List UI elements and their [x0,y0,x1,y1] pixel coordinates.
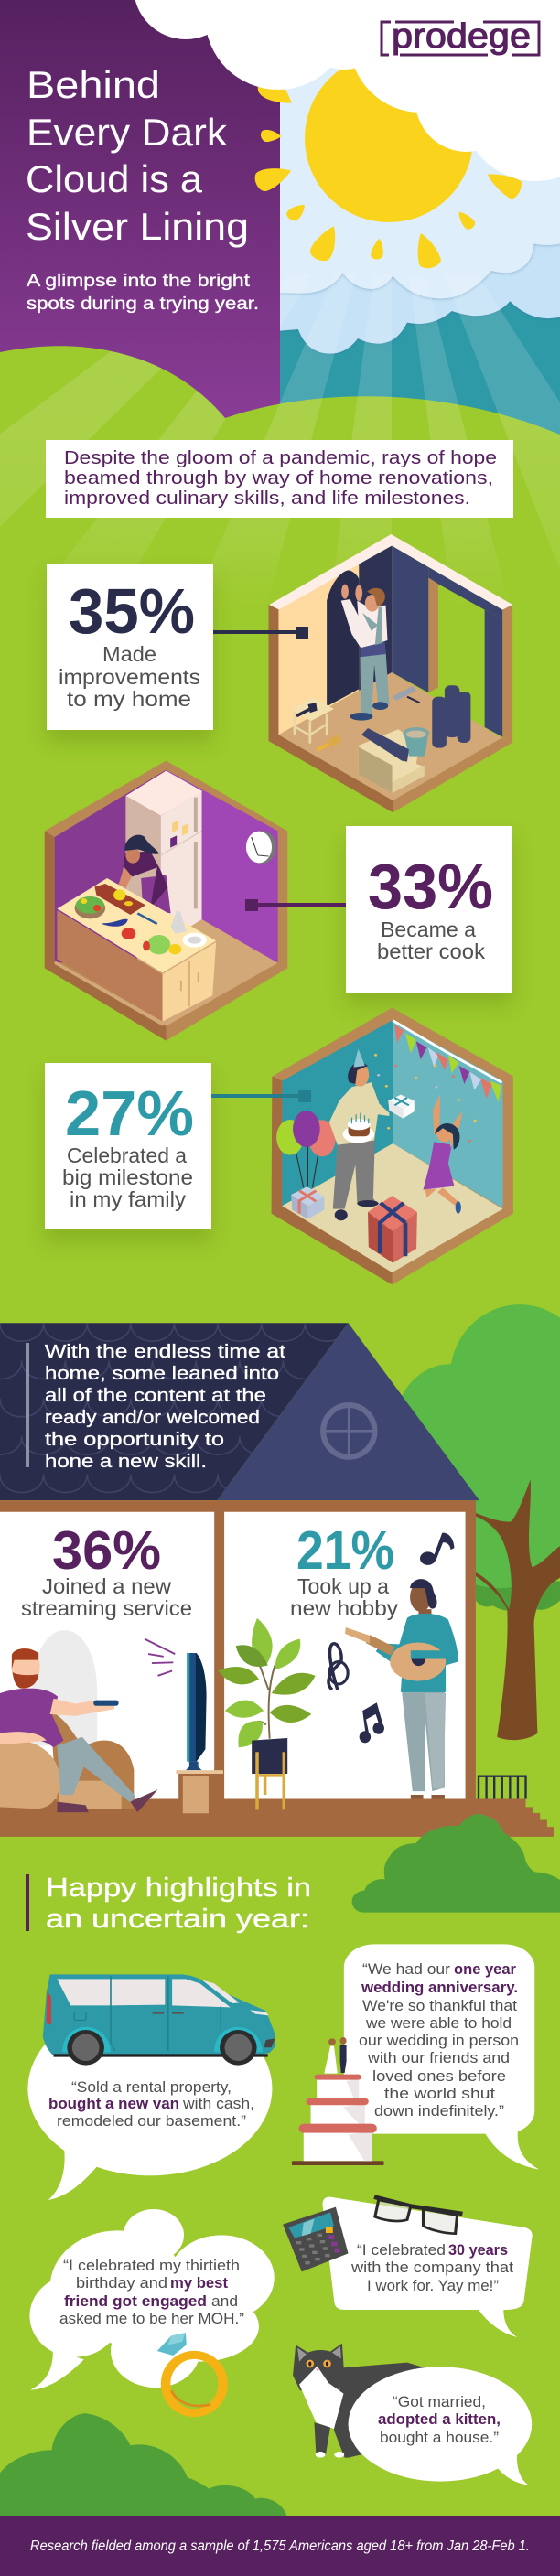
quote: wedding [292,1944,539,2170]
illustration: celebration room [272,1008,513,1284]
subtitle: A glimpse into the bright [27,272,251,291]
man with cake [329,1049,389,1220]
quote text [378,2393,501,2446]
quote text: with the company that [350,2259,513,2276]
quote text: wedding anniversary. [361,1979,518,1996]
roof text: the opportunity to [45,1430,224,1450]
wall clock [246,831,276,864]
quote text [350,2241,513,2294]
title: Silver Lining [26,205,249,248]
stat: 36%: streaming service [21,1596,192,1620]
quote text: bought a house.” [380,2429,499,2446]
counter [55,878,216,1026]
purple sky [0,0,280,430]
intro text box: improved culinary skills, and life milestones. [64,488,470,509]
bush: right [352,1814,560,1913]
fridge [125,771,202,945]
quote text: I work for. Yay me!” [367,2277,499,2294]
icon: wedding cake [292,2037,384,2165]
stat card: 33%: Became a [381,918,476,941]
confetti [374,1054,477,1143]
stat: 21%: 21% [296,1520,394,1581]
title [26,63,249,248]
stat card: 33%: better cook [377,939,486,963]
roof text: ready and/or welcomed [45,1408,260,1428]
speech bubble [322,2197,533,2337]
bush: bottom left [0,2413,286,2516]
quote text: We're so thankful that [362,1997,517,2014]
quote text: down indefinitely.” [374,2102,504,2120]
intro text box: beamed through by way of home renovations, [64,468,493,488]
illustration: tree [394,1304,560,1740]
green hills [0,346,560,640]
sun rays fan [0,274,560,579]
heading: happy highlights [26,1873,311,1934]
quote: van [27,1974,275,2200]
speech bubble [29,2209,275,2390]
wallpaper rolls [361,685,470,762]
intro text box [46,440,513,518]
quote text: with our friends and [367,2049,510,2066]
footer: Research fielded among a sample of 1,575 Americans aged 18+ from Jan 28-Feb 1. [30,2538,530,2554]
icon: glasses [374,2197,462,2234]
title: Behind [27,63,160,106]
sun [305,54,473,222]
quote: engaged [29,2209,275,2413]
stat: 36%: 36% [52,1520,161,1581]
stat card: 35%: to my home [67,687,191,711]
quote: thirty years [283,2197,533,2337]
quote text: asked me to be her MOH.” [59,2310,244,2327]
stat: 21%: Took up a [297,1574,389,1598]
connector 27% [211,1090,311,1102]
roof text: With the endless time at [45,1342,286,1362]
music notes [328,1533,454,1743]
stat card: 27% [45,1063,211,1229]
connector 33% [245,899,346,911]
footer [0,2516,560,2576]
speech bubble [344,1944,539,2170]
panel: house [0,1323,554,1837]
roof text: home, some leaned into [45,1364,279,1384]
stat card: 27%: big milestone [62,1165,193,1189]
stat card: 33% [346,826,512,993]
pale blue cloud [280,46,560,298]
quote text: remodeled our basement.” [57,2112,246,2130]
quote text: the world shut [384,2085,495,2102]
intro text box: Despite the gloom of a pandemic, rays of hope [64,448,497,468]
stat card: 27%: Celebrated a [67,1143,187,1167]
heading: happy highlights: Happy highlights in [46,1873,311,1903]
quote text: my best [170,2274,228,2292]
roof text bar [26,1343,29,1467]
steps [359,729,425,793]
stat: 36%: Joined a new [42,1574,171,1598]
teal sky [280,55,560,439]
quote text: “Sold a rental property, [71,2078,232,2096]
quote text: “I celebrated [357,2241,446,2259]
subtitle: spots during a trying year. [27,295,259,314]
man on armchair [0,1630,158,1812]
stat card: 35%: Made [102,642,156,666]
house walls and porch [0,1500,554,1837]
cook [118,835,171,913]
heading: happy highlights: an uncertain year: [46,1905,309,1934]
quote text: birthday and [76,2274,167,2292]
quote text: bought a new van [48,2095,179,2112]
illustration: kitchen room [45,761,287,1041]
panel: hero [0,0,560,640]
title: Cloud is a [26,157,203,200]
stat card: 35%: improvements [59,665,200,689]
quote text: “I celebrated my thirtieth [63,2257,240,2274]
quote text [48,2078,254,2130]
icon: cat [293,2344,428,2458]
stat card: 35%: 35% [69,575,195,647]
title: Every Dark [27,111,228,154]
quote text: one year [454,1960,516,1978]
quote text [359,1960,519,2120]
roof [0,1323,479,1500]
quote: cat [293,2344,532,2485]
quote text: loved ones before [372,2067,506,2085]
speech bubble [349,2367,532,2485]
quote text: our wedding in person [359,2032,519,2049]
big gift [368,1196,417,1263]
stat: 21%: new hobby [290,1596,399,1620]
icon: calculator [283,2207,349,2271]
stat card: 27%: 27% [65,1078,194,1149]
worker [341,585,389,721]
subtitle [27,272,259,314]
quote text: we were able to hold [365,2014,512,2032]
roof text: all of the content at the [45,1386,266,1406]
stat: 21% [290,1520,399,1620]
balloons [276,1111,336,1187]
quote text: 30 years [448,2241,508,2259]
quote text: “Got married, [393,2393,486,2410]
white gift [388,1095,415,1119]
quote text: and [211,2292,238,2310]
logo: prodege [392,17,531,56]
illustration: home improvement room [269,534,512,812]
mid blue cloud [280,244,560,354]
quote text [59,2257,244,2327]
food on counter [75,884,207,954]
roof text [45,1342,286,1472]
quote text: “We had our [362,1960,450,1978]
stool and tools [291,686,420,750]
icon: ring [157,2333,223,2413]
girl [424,1095,462,1214]
quote text: with cash, [182,2095,254,2112]
small gift [291,1186,324,1219]
stat card: 33%: 33% [368,851,493,922]
bunting [393,1021,501,1102]
quote text: friend got engaged [64,2292,207,2310]
quote text: adopted a kitten, [378,2410,501,2428]
sun petals [255,87,522,268]
white top cloud [134,0,560,181]
paint bucket [403,727,429,757]
potted plant [218,1618,316,1809]
woman playing guitar [345,1579,458,1799]
speech bubble [27,2002,272,2200]
roof text: hone a new skill. [45,1452,207,1472]
stat: 36% [21,1520,192,1620]
stat card: 35% [47,564,213,730]
stat card: 27%: in my family [70,1187,187,1211]
icon: van [43,1974,275,2066]
connector 35% [213,627,308,639]
tv with signal lines [145,1639,223,1813]
